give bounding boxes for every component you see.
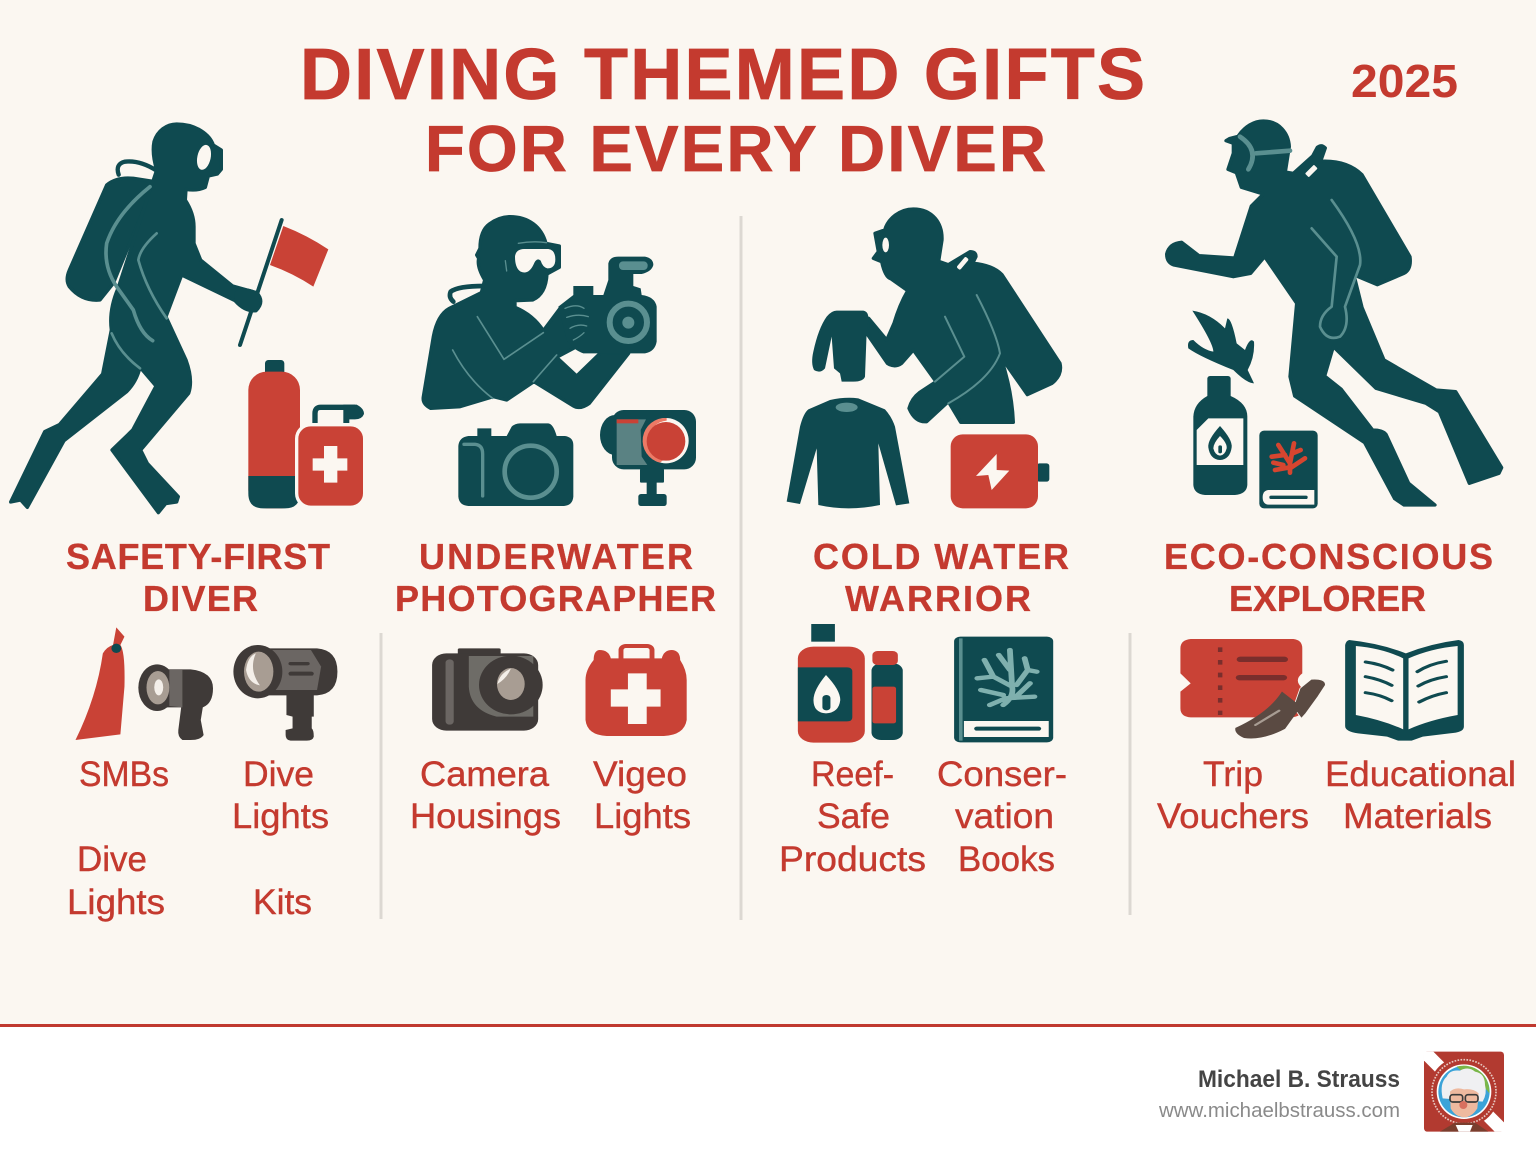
icon: swimming diver [1167, 121, 1502, 505]
icon: SMB [76, 627, 125, 740]
icon: diver holding hood [812, 209, 1061, 422]
labels: photographer gifts: Lights [594, 797, 691, 836]
title: DIVING THEMED GIFTS [300, 35, 1145, 115]
labels: eco gifts [1157, 755, 1516, 836]
footer author text [1158, 1066, 1400, 1122]
panel: underwater photographer [395, 217, 716, 836]
icon: diver with flag [11, 124, 328, 513]
logo: author portrait badge [1424, 1052, 1504, 1132]
panel: safety-first diver [11, 124, 365, 922]
heading: eco-conscious explorer [1164, 536, 1493, 619]
heading: safety-first diver: DIVER [143, 578, 258, 619]
icon: open book [1345, 640, 1464, 741]
heading: eco-conscious explorer: EXPLORER [1229, 578, 1426, 619]
icon: conservation book [954, 637, 1053, 742]
heading: safety-first diver [66, 536, 330, 619]
title [300, 35, 1145, 185]
heading: underwater photographer: UNDERWATER [419, 536, 693, 577]
labels: cold water gifts: Safe [817, 797, 890, 836]
labels: photographer gifts [410, 755, 691, 836]
labels: safety-first gifts: Lights [67, 883, 165, 922]
icon: camera housing [432, 648, 543, 731]
panel: eco-conscious explorer [1157, 121, 1516, 836]
labels: photographer gifts: Camera [420, 755, 550, 794]
heading: eco-conscious explorer: ECO-CONSCIOUS [1164, 536, 1493, 577]
labels: safety-first gifts [67, 755, 329, 922]
icon: eco bottle [1193, 376, 1247, 495]
labels: safety-first gifts: Kits [253, 883, 312, 922]
heading: cold water warrior: COLD WATER [813, 536, 1069, 577]
labels: eco gifts: Trip [1203, 755, 1263, 794]
labels: photographer gifts: Vigeo [593, 755, 687, 794]
labels: cold water gifts: Reef- [811, 755, 894, 794]
labels: photographer gifts: Housings [410, 797, 561, 836]
heading: safety-first diver: SAFETY-FIRST [66, 536, 330, 577]
icon: small dive light [138, 664, 213, 740]
labels: safety-first gifts: Dive [243, 755, 314, 794]
labels: cold water gifts: Products [779, 840, 926, 879]
year label: 2025 [1351, 55, 1458, 107]
icon: trip voucher [1180, 639, 1302, 717]
icon: cylinder and first-aid kit [248, 360, 365, 508]
footer author text: Michael B. Strauss [1198, 1066, 1400, 1093]
footer band [0, 1024, 1536, 1154]
labels: cold water gifts [779, 755, 1067, 879]
icon: camera [458, 423, 573, 506]
icon: first-aid case [586, 646, 687, 736]
heading: cold water warrior: WARRIOR [845, 578, 1031, 619]
labels: eco gifts: Materials [1343, 797, 1492, 836]
icon: kelp [1188, 311, 1254, 383]
title: FOR EVERY DIVER [425, 112, 1046, 185]
labels: cold water gifts: vation [955, 797, 1054, 836]
icon: coral book [1259, 431, 1318, 508]
icon: reef-safe bottles [798, 624, 903, 743]
icon: large dive light [233, 645, 337, 741]
heading: underwater photographer [395, 536, 716, 619]
labels: cold water gifts: Books [958, 840, 1055, 879]
footer author text: www.michaelbstrauss.com [1158, 1100, 1400, 1122]
labels: cold water gifts: Conser- [937, 755, 1067, 794]
labels: safety-first gifts: SMBs [79, 755, 169, 794]
icon: heated battery pack [951, 434, 1049, 508]
icon: diver with camera [423, 217, 657, 408]
icon: video light [600, 410, 696, 506]
labels: eco gifts: Educational [1325, 755, 1516, 794]
heading: underwater photographer: PHOTOGRAPHER [395, 578, 716, 619]
labels: safety-first gifts: Dive [77, 840, 147, 879]
heading: cold water warrior [813, 536, 1069, 619]
icon: dive knife [1236, 679, 1326, 738]
icon: thermal top [787, 398, 909, 508]
labels: safety-first gifts: Lights [232, 797, 329, 836]
labels: eco gifts: Vouchers [1157, 797, 1309, 836]
panel: cold water warrior [779, 209, 1069, 879]
